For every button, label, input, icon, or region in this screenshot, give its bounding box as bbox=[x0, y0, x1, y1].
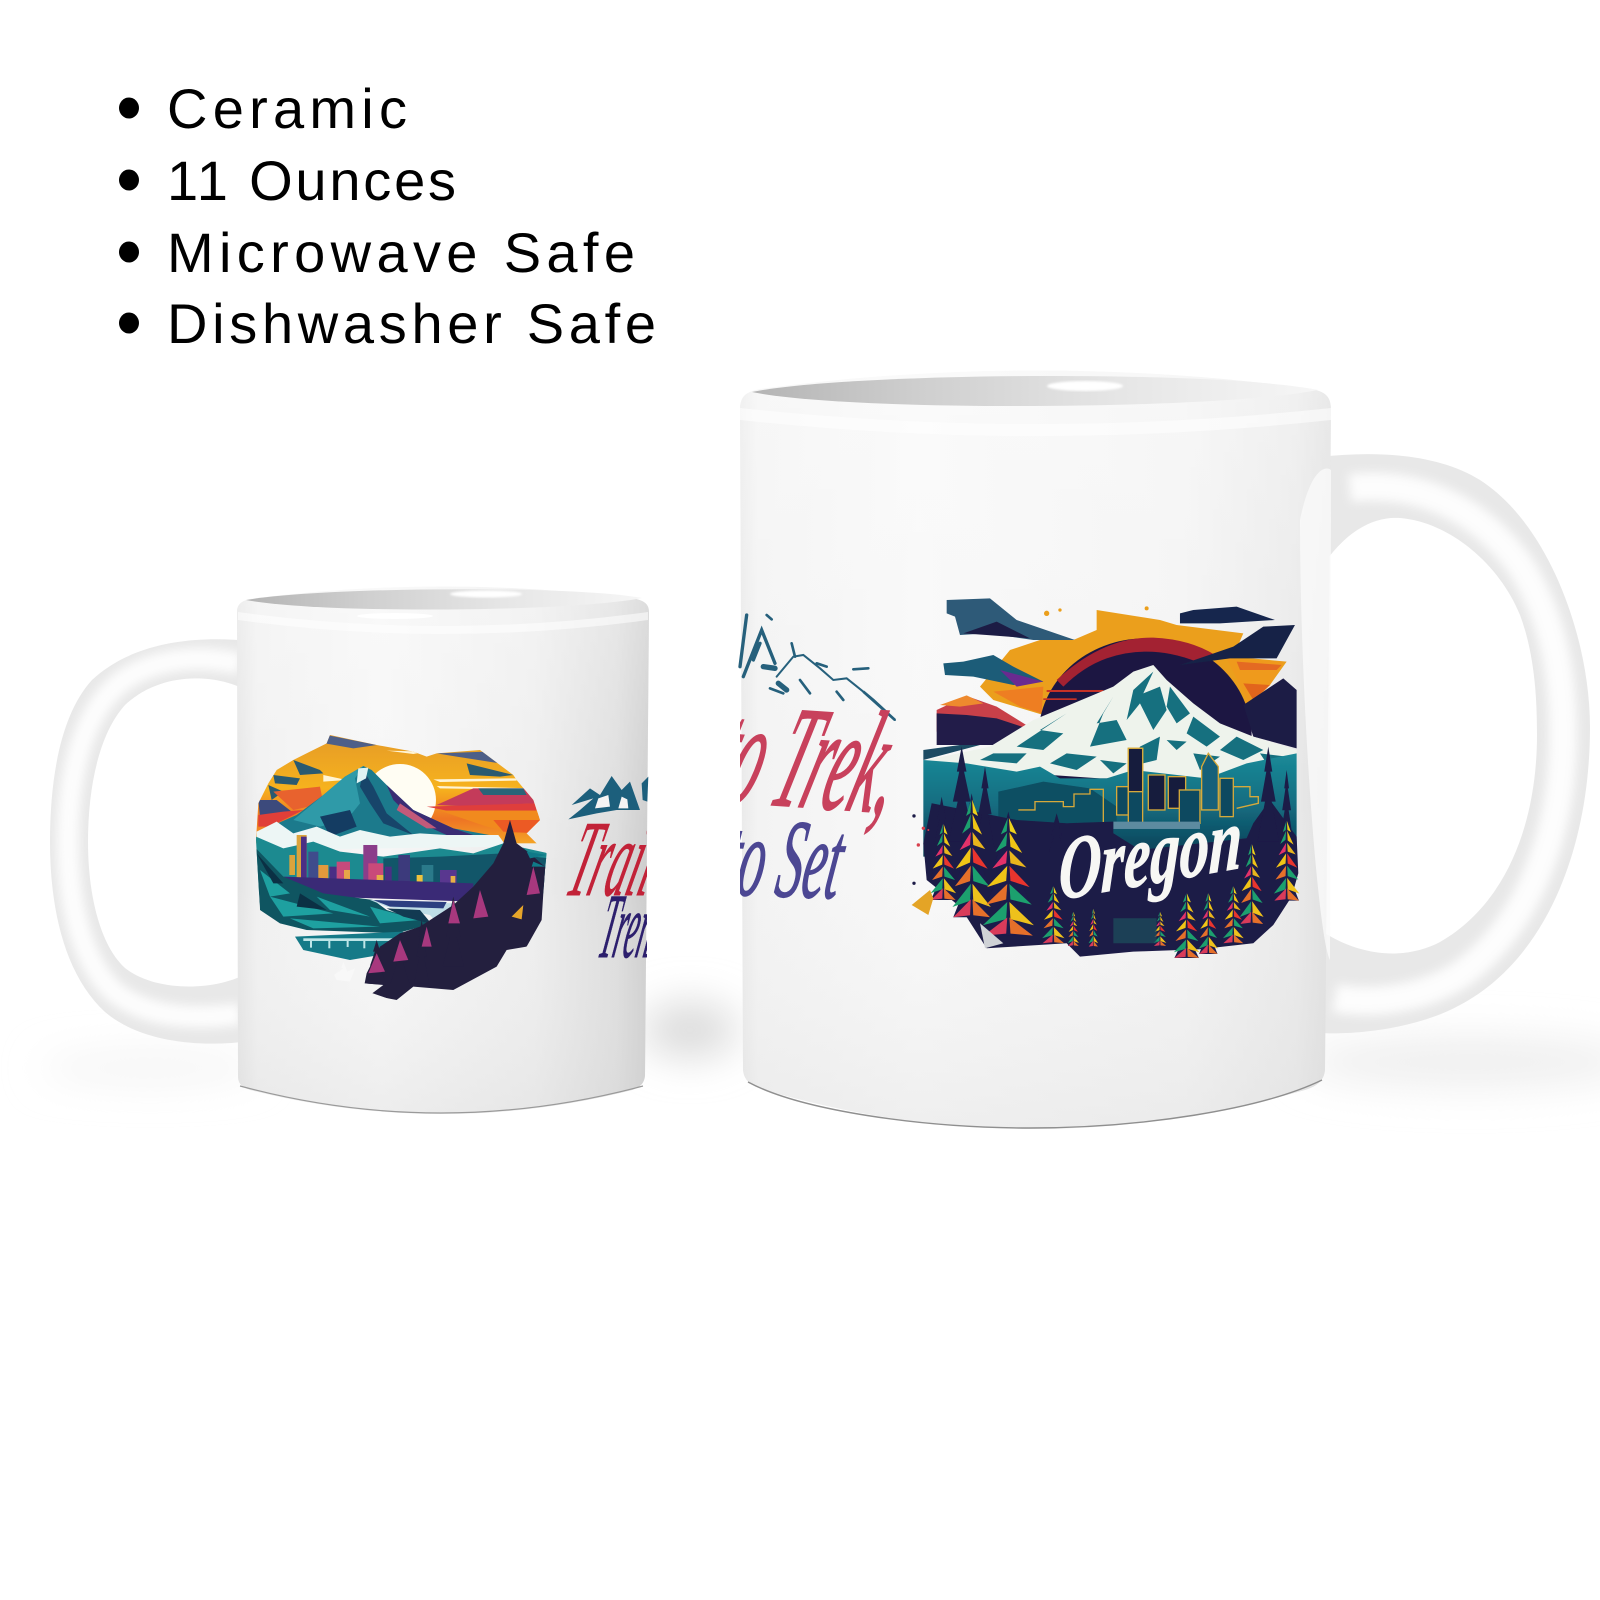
left forest bbox=[256, 848, 432, 933]
small mug body bbox=[237, 586, 649, 1114]
sun bbox=[375, 764, 436, 818]
product scene: Trends bbox=[592, 876, 691, 978]
Oregon lettering: Oregon bbox=[1057, 789, 1244, 920]
top-left cloud bbox=[947, 598, 1075, 640]
hills bbox=[256, 837, 548, 893]
small mug bbox=[50, 586, 691, 1114]
bullet: ceramic: Ceramic bbox=[167, 77, 407, 140]
large mug bbox=[695, 370, 1590, 1129]
teal valley bbox=[923, 753, 1297, 857]
skyline bbox=[289, 835, 457, 888]
floor shadows bbox=[40, 1002, 1600, 1086]
large mug slogan mountains bbox=[740, 615, 895, 720]
large mug handle bbox=[1320, 454, 1590, 1033]
large mug slogan text: to Set bbox=[716, 796, 854, 923]
dark forest bbox=[363, 820, 548, 1002]
bullet: microwave safe: Microwave Safe bbox=[167, 221, 635, 284]
dark forest base bbox=[923, 800, 1298, 957]
right sky bands bbox=[437, 788, 535, 807]
right sky and hills bbox=[1227, 658, 1283, 705]
product scene: Trails bbox=[556, 799, 691, 919]
large mug rim bbox=[752, 376, 1318, 406]
bullet: ounces: 11 Ounces bbox=[167, 149, 456, 212]
river bbox=[370, 900, 452, 918]
snow mountain bbox=[927, 665, 1297, 778]
splatter bbox=[917, 827, 929, 847]
orange sky splash bbox=[980, 610, 1287, 715]
bullet: dishwasher safe: Dishwasher Safe bbox=[167, 292, 656, 355]
large mug artwork: Oregon mountain scene bbox=[912, 598, 1299, 958]
sky bbox=[253, 733, 550, 843]
top-right splash bbox=[1180, 607, 1275, 623]
large mug body bbox=[740, 370, 1331, 1129]
dark sun bbox=[1038, 638, 1252, 835]
small mug artwork: mountain and city circle bbox=[253, 733, 550, 1002]
red hills bbox=[937, 696, 1032, 735]
city skyline bbox=[1018, 748, 1258, 825]
small mug rim bbox=[246, 589, 642, 610]
large mug slogan text bbox=[740, 710, 893, 900]
dark pines bbox=[931, 747, 1293, 879]
volcano bbox=[278, 766, 490, 837]
small mug slogan mountains bbox=[568, 776, 648, 819]
product scene bbox=[50, 88, 1600, 1129]
mid-left cloud bbox=[943, 655, 1043, 685]
large mug: to Trek, bbox=[695, 674, 926, 844]
feature list bbox=[119, 77, 656, 355]
clouds bbox=[257, 822, 507, 850]
colorful pines bbox=[952, 793, 991, 917]
lake bbox=[295, 932, 403, 960]
small mug handle bbox=[50, 639, 250, 1044]
small mug slogan text bbox=[566, 824, 647, 958]
foreground leaf bbox=[332, 962, 355, 982]
